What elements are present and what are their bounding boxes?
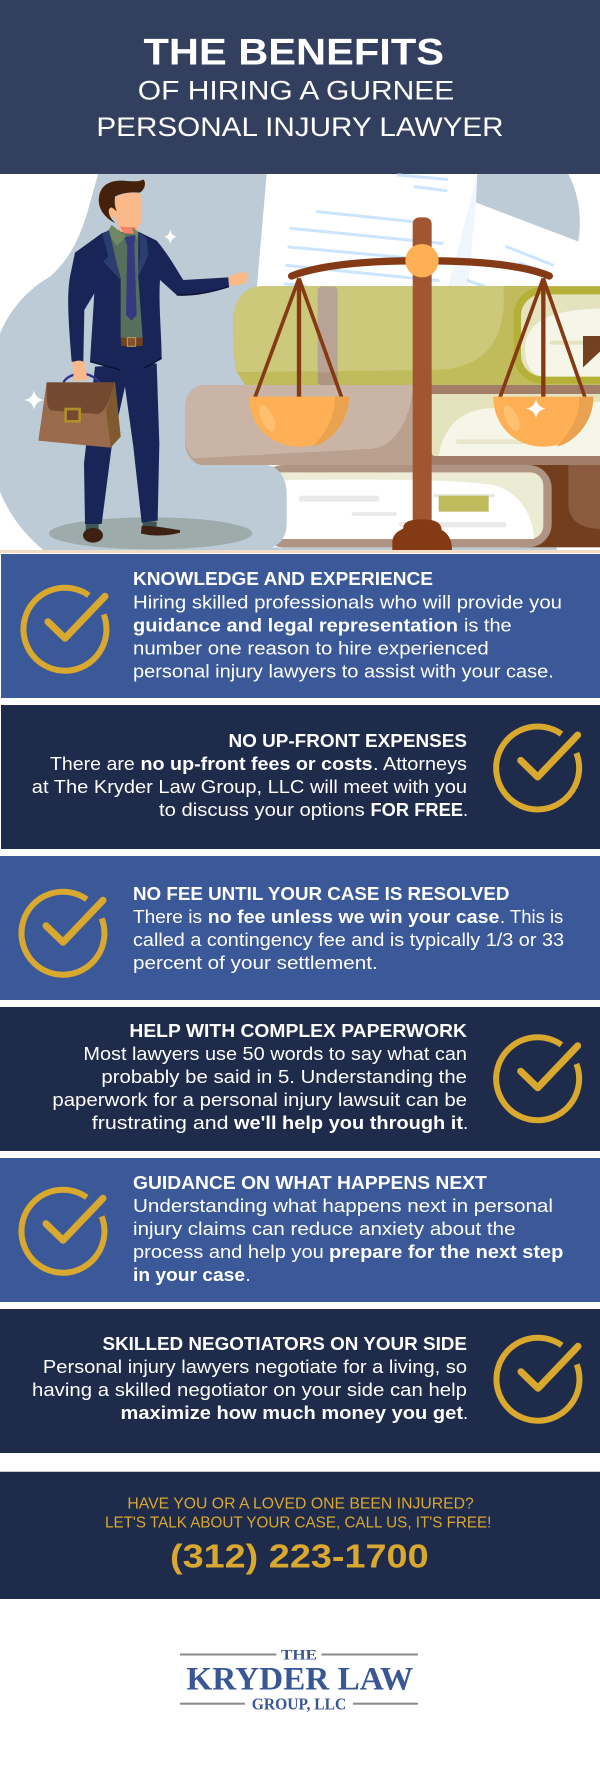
body text: injury claims can reduce anxiety about the (133, 1218, 516, 1239)
icon: gold check circle (21, 892, 104, 975)
body text: Personal injury lawyers negotiate for a living, so (43, 1356, 467, 1377)
body text (133, 1195, 563, 1285)
body text: having a skilled negotiator on your side can help (32, 1379, 467, 1400)
body text: . This is (500, 906, 563, 927)
panel: no fee until your case is resolved (0, 856, 600, 1000)
background blob (0, 174, 287, 550)
body text: maximize how much money you get (120, 1402, 463, 1423)
icon: gold check circle (496, 1338, 579, 1421)
body text: . (463, 799, 468, 820)
body text: . (463, 1402, 468, 1423)
left pan (249, 397, 349, 447)
beige floor line (0, 550, 600, 553)
body text (133, 906, 564, 973)
body text (32, 753, 468, 820)
scales of justice (249, 217, 593, 550)
title header (0, 0, 600, 174)
body text (133, 592, 562, 681)
body text (52, 1043, 468, 1133)
panel: help with complex paperwork (0, 1007, 600, 1151)
body text: called a contingency fee and is typically 1/3 or 33 (133, 929, 564, 950)
body text: . (463, 1112, 468, 1133)
body text: . (246, 1264, 251, 1285)
body text: no up-front fees or costs (140, 753, 372, 774)
panel: guidance on what happens next (0, 1158, 600, 1302)
heading: NO FEE UNTIL YOUR CASE IS RESOLVED (133, 883, 509, 904)
heading: the benefits: THE BENEFITS (144, 32, 444, 73)
icon: gold check circle (496, 726, 579, 809)
logo: the kryder law group: THE (281, 1647, 317, 1663)
body text: frustrating and (92, 1112, 228, 1133)
body text: probably be said in 5. Understanding the (101, 1066, 467, 1087)
body text: is the (464, 614, 512, 636)
icon: gold check circle (23, 588, 106, 671)
bottom book (260, 465, 600, 550)
call to action text: LET'S TALK ABOUT YOUR CASE, CALL US, IT'S FREE! (105, 1514, 491, 1531)
body text (32, 1356, 468, 1423)
subtitle line 2: PERSONAL INJURY LAWYER (96, 112, 504, 142)
body text: There are (50, 753, 135, 774)
body text: paperwork for a personal injury lawsuit can be (52, 1089, 467, 1110)
body text: to discuss your options (159, 799, 365, 820)
heading: KNOWLEDGE AND EXPERIENCE (133, 568, 433, 589)
illustration: lawyer, books and scales (0, 174, 600, 553)
subtitle line 1: OF HIRING A GURNEE (138, 76, 454, 106)
panel: knowledge and experience (1, 554, 600, 698)
body text: we'll help you through it (233, 1112, 463, 1133)
body text: Understanding what happens next in personal (133, 1195, 553, 1216)
body text: personal injury lawyers to assist with your case. (133, 660, 554, 681)
body text: process and help you (133, 1241, 324, 1262)
panel: call to action (0, 1471, 600, 1599)
briefcase (38, 382, 121, 448)
icon: gold check circle (21, 1190, 104, 1273)
body text: in your case (133, 1264, 245, 1285)
body text: FOR FREE (370, 799, 463, 820)
panel: skilled negotiators on your side (0, 1309, 600, 1453)
body text: . Attorneys (373, 753, 467, 774)
sparkles (24, 229, 546, 419)
body text: Hiring skilled professionals who will provide you (133, 592, 562, 613)
panel: no up-front expenses (1, 705, 600, 849)
phone number: (312) 223-1700 (170, 1537, 429, 1574)
heading: SKILLED NEGOTIATORS ON YOUR SIDE (102, 1333, 467, 1354)
body text: Most lawyers use 50 words to say what can (83, 1043, 467, 1064)
right pan (493, 397, 593, 447)
body text: at The Kryder Law Group, LLC will meet with you (32, 776, 467, 797)
body text: There is (133, 906, 202, 927)
call to action text (105, 1495, 491, 1531)
logo: the kryder law group: KRYDER LAW (186, 1662, 413, 1698)
paper document (255, 174, 592, 290)
body text: prepare for the next step (329, 1241, 563, 1262)
top right blob (476, 174, 580, 242)
body text: no fee unless we win your case (208, 906, 499, 927)
icon: gold check circle (496, 1037, 579, 1120)
heading: NO UP-FRONT EXPENSES (228, 730, 467, 751)
middle book (185, 385, 600, 465)
logo: the kryder law group (180, 1647, 418, 1713)
body text: number one reason to hire experienced (133, 638, 489, 658)
heading: HELP WITH COMPLEX PAPERWORK (129, 1020, 468, 1041)
lawyer figure (38, 179, 252, 549)
body text: percent of your settlement. (133, 952, 378, 973)
top green book (233, 286, 600, 385)
logo: the kryder law group: GROUP, LLC (252, 1694, 346, 1713)
call to action text: HAVE YOU OR A LOVED ONE BEEN INJURED? (127, 1495, 474, 1512)
heading: GUIDANCE ON WHAT HAPPENS NEXT (133, 1172, 488, 1193)
body text: guidance and legal representation (133, 614, 458, 636)
